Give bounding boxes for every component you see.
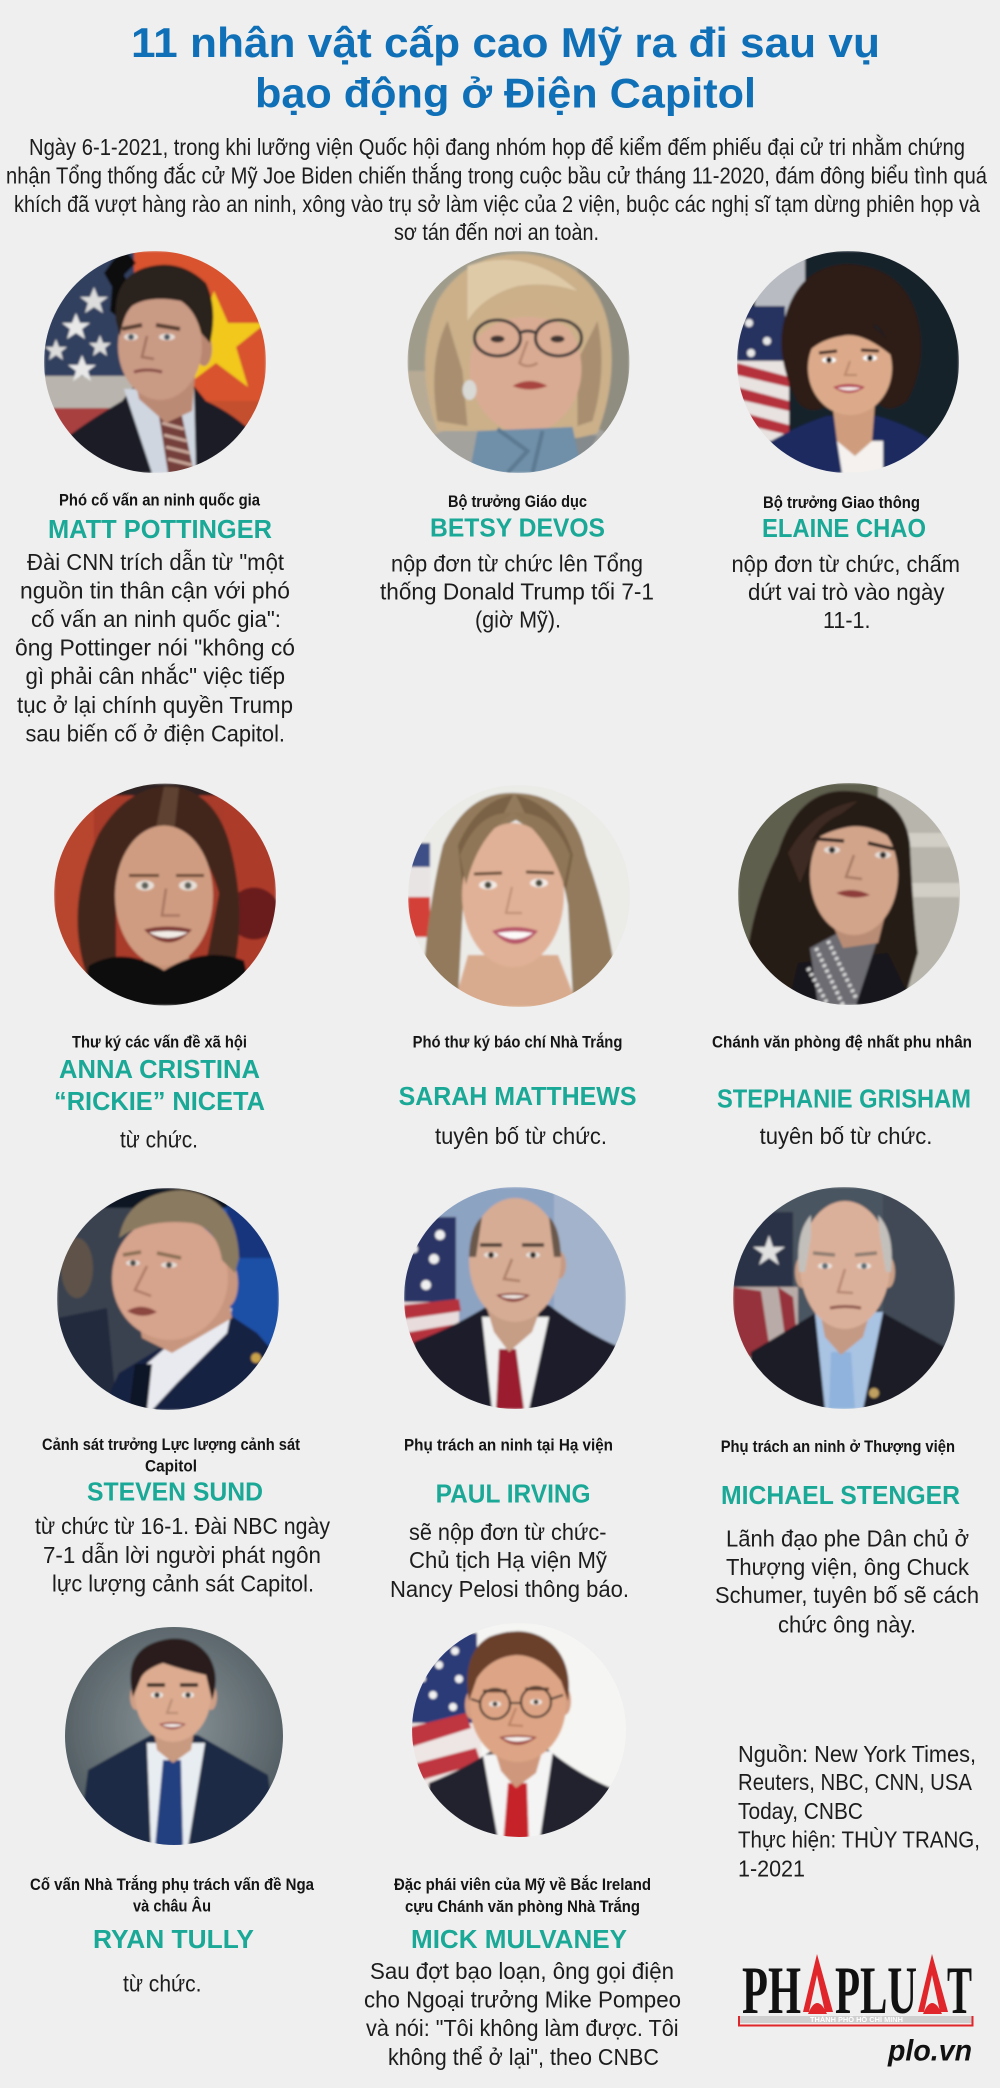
description: (giờ Mỹ). xyxy=(475,607,561,633)
source credits: Reuters, NBC, CNN, USA xyxy=(738,1769,973,1795)
role: Phụ trách an ninh tại Hạ viện xyxy=(404,1437,613,1455)
role: Phụ trách an ninh ở Thượng viện xyxy=(721,1438,955,1456)
portrait: Paul Irving xyxy=(404,1187,626,1409)
panel: Stephanie Grisham xyxy=(712,783,972,1149)
description: dứt vai trò vào ngày xyxy=(748,579,945,605)
title xyxy=(131,19,880,116)
description: Chủ tịch Hạ viện Mỹ xyxy=(409,1547,607,1573)
role xyxy=(30,1875,315,1916)
description xyxy=(732,551,960,633)
name: STEVEN SUND xyxy=(87,1479,263,1507)
description xyxy=(390,1519,629,1602)
name: MATT POTTINGER xyxy=(48,516,272,544)
description: cố vấn an ninh quốc gia": xyxy=(31,606,281,632)
description: nộp đơn từ chức, chấm xyxy=(732,551,960,577)
source credits: Today, CNBC xyxy=(738,1798,863,1824)
portrait: Mick Mulvaney xyxy=(412,1630,610,1837)
portrait: Elaine Chao xyxy=(737,251,959,473)
name: PAUL IRVING xyxy=(436,1481,591,1509)
description: Thượng viện, ông Chuck xyxy=(726,1554,969,1580)
description: tuyên bố từ chức. xyxy=(435,1123,607,1149)
description: từ chức. xyxy=(120,1127,198,1153)
panel: Michael Stenger xyxy=(715,1187,979,1638)
role: Phó thư ký báo chí Nhà Trắng xyxy=(413,1033,622,1052)
logo: Pháp Luật: THÀNH PHỐ HỒ CHÍ MINH xyxy=(810,2014,903,2024)
name: BETSY DEVOS xyxy=(430,515,605,543)
description: Lãnh đạo phe Dân chủ ở xyxy=(726,1526,969,1552)
panel: Anna Cristina Niceta xyxy=(54,784,280,1153)
role: Bộ trưởng Giao thông xyxy=(763,494,920,512)
name: MICK MULVANEY xyxy=(411,1926,627,1954)
description: Nancy Pelosi thông báo. xyxy=(390,1576,629,1602)
description: sẽ nộp đơn từ chức- xyxy=(409,1519,606,1545)
description: Đài CNN trích dẫn từ "một xyxy=(27,549,285,575)
role: Phó cố vấn an ninh quốc gia xyxy=(59,492,261,510)
description: Sau đợt bạo loạn, ông gọi điện xyxy=(370,1958,674,1984)
description: gì phải cân nhắc" việc tiếp xyxy=(26,663,285,689)
name: SARAH MATTHEWS xyxy=(399,1083,636,1111)
source credits: Nguồn: New York Times, xyxy=(738,1741,976,1767)
description xyxy=(35,1513,330,1597)
description: ông Pottinger nói "không có xyxy=(15,635,295,661)
panel: Steven Sund xyxy=(35,1188,330,1597)
logo: Pháp Luật xyxy=(739,1952,972,2068)
role: Đặc phái viên của Mỹ về Bắc Ireland xyxy=(394,1875,651,1894)
panel: Paul Irving xyxy=(390,1187,629,1602)
panel: Matt Pottinger xyxy=(15,251,295,747)
portrait: Matt Pottinger xyxy=(44,251,266,473)
description: từ chức. xyxy=(123,1971,202,1997)
description: từ chức từ 16-1. Đài NBC ngày xyxy=(35,1513,330,1539)
portrait: Rickie Niceta xyxy=(54,784,280,1006)
logo: Pháp Luật: plo.vn xyxy=(887,2035,972,2068)
role: Bộ trưởng Giáo dục xyxy=(448,493,587,511)
name: RYAN TULLY xyxy=(93,1926,254,1954)
portrait: Stephanie Grisham xyxy=(738,783,963,1005)
name: ELAINE CHAO xyxy=(762,515,926,543)
name: “RICKIE” NICETA xyxy=(54,1088,265,1116)
description xyxy=(380,551,654,633)
description: nguồn tin thân cận với phó xyxy=(20,578,290,604)
role: Thư ký các vấn đề xã hội xyxy=(72,1034,247,1052)
source credits: 1-2021 xyxy=(738,1856,805,1882)
panel: Ryan Tully xyxy=(30,1625,315,1997)
portrait: Sarah Matthews xyxy=(408,785,630,1007)
description: 11-1. xyxy=(823,607,870,633)
role: và châu Âu xyxy=(133,1897,211,1916)
role: Capitol xyxy=(145,1458,197,1476)
description xyxy=(15,549,295,747)
logo: Pháp Luật: T xyxy=(947,1952,972,2028)
portrait: Michael Stenger xyxy=(733,1187,955,1409)
intro paragraph xyxy=(6,134,987,245)
role xyxy=(394,1875,651,1916)
description: chức ông này. xyxy=(778,1612,916,1638)
panel: Sarah Matthews xyxy=(399,785,636,1149)
panel: Mick Mulvaney xyxy=(364,1623,681,2070)
portrait: Steven Sund xyxy=(57,1188,279,1410)
portrait: Ryan Tully xyxy=(63,1625,285,1847)
name: ANNA CRISTINA xyxy=(59,1056,260,1084)
logo: Pháp Luật: PH xyxy=(742,1952,801,2028)
description xyxy=(364,1958,681,2070)
role: Cố vấn Nhà Trắng phụ trách vấn đề Nga xyxy=(30,1875,315,1894)
description xyxy=(715,1526,979,1638)
name: STEPHANIE GRISHAM xyxy=(717,1086,971,1114)
intro paragraph: sơ tán đến nơi an toàn. xyxy=(394,219,599,245)
description: cho Ngoại trưởng Mike Pompeo xyxy=(364,1987,681,2013)
description: 7-1 dẫn lời người phát ngôn xyxy=(43,1542,321,1568)
portrait: Betsy DeVos xyxy=(408,251,630,473)
name: MICHAEL STENGER xyxy=(721,1482,960,1510)
description: nộp đơn từ chức lên Tổng xyxy=(391,551,643,577)
title: 11 nhân vật cấp cao Mỹ ra đi sau vụ xyxy=(131,19,880,66)
role: cựu Chánh văn phòng Nhà Trắng xyxy=(405,1897,640,1916)
panel: Elaine Chao xyxy=(732,251,960,633)
role: Cảnh sát trưởng Lực lượng cảnh sát xyxy=(42,1436,300,1454)
source credits xyxy=(738,1741,980,1882)
panel: Betsy DeVos xyxy=(380,251,654,633)
role xyxy=(42,1436,300,1476)
description: tục ở lại chính quyền Trump xyxy=(17,692,293,718)
description: sau biến cố ở điện Capitol. xyxy=(26,721,285,747)
name xyxy=(54,1056,265,1116)
title: bạo động ở Điện Capitol xyxy=(255,70,756,116)
description: thống Donald Trump tối 7-1 xyxy=(380,578,654,604)
role: Chánh văn phòng đệ nhất phu nhân xyxy=(712,1034,972,1052)
description: không thể ở lại", theo CNBC xyxy=(388,2044,659,2070)
description: lực lượng cảnh sát Capitol. xyxy=(52,1571,314,1597)
description: tuyên bố từ chức. xyxy=(760,1123,932,1149)
description: Schumer, tuyên bố sẽ cách xyxy=(715,1582,979,1608)
description: và nói: "Tôi không làm được. Tôi xyxy=(366,2015,679,2041)
logo: Pháp Luật: PLU xyxy=(835,1952,917,2028)
